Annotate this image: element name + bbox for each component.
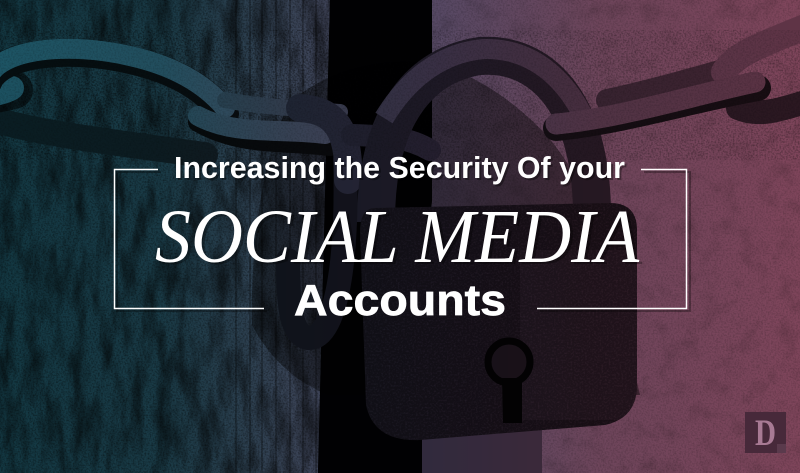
title frame shadow	[117, 172, 690, 311]
third link top	[300, 108, 348, 180]
wood below padlock	[422, 425, 542, 473]
vertical link bottom	[288, 160, 346, 338]
second link lower strand shadow	[198, 122, 330, 146]
link lower strand shadow	[556, 88, 758, 128]
dark gap between doors	[318, 0, 432, 473]
heading line 3: Accounts	[294, 276, 506, 325]
left wooden door	[0, 0, 330, 473]
heading line 1 shadow: Increasing the Security Of your	[176, 152, 627, 187]
title frame	[114, 170, 686, 308]
small end link	[0, 90, 14, 95]
link lower strand	[556, 82, 755, 124]
lower strand of first link	[0, 118, 205, 155]
link upper strand	[607, 72, 716, 100]
left door shading	[0, 0, 300, 473]
second link lower strand	[198, 116, 325, 134]
heading line 2: SOCIAL MEDIA	[155, 195, 640, 279]
plaster texture	[432, 0, 800, 473]
small end link highlight	[0, 88, 12, 95]
dark rounded overlay shape	[252, 62, 640, 395]
chain and scene grain	[0, 30, 800, 160]
logo badge: D	[755, 413, 776, 454]
padlock shackle	[376, 49, 592, 222]
fine surface grain right	[432, 0, 800, 473]
heading line 2 shadow: SOCIAL MEDIA	[158, 197, 643, 281]
heading text	[155, 150, 643, 325]
shackle highlight	[384, 49, 586, 122]
heading line 1: Increasing the Security Of your	[174, 150, 625, 185]
first link top strand shadow	[0, 53, 225, 114]
padlock texture	[355, 195, 645, 445]
padlock body	[360, 203, 637, 440]
right wooden door	[422, 0, 800, 473]
chain, left links	[0, 49, 430, 338]
first link top strand	[0, 49, 225, 108]
wood blotches	[0, 0, 334, 473]
logo badge	[745, 412, 786, 454]
outgoing link upper strand	[724, 24, 800, 72]
shackle body	[376, 56, 592, 222]
outgoing link lower strand	[738, 100, 800, 112]
chain, right links	[556, 24, 800, 128]
second link top strand	[225, 100, 340, 112]
keyhole	[488, 341, 530, 423]
horizontal link behind shackle	[352, 135, 430, 150]
